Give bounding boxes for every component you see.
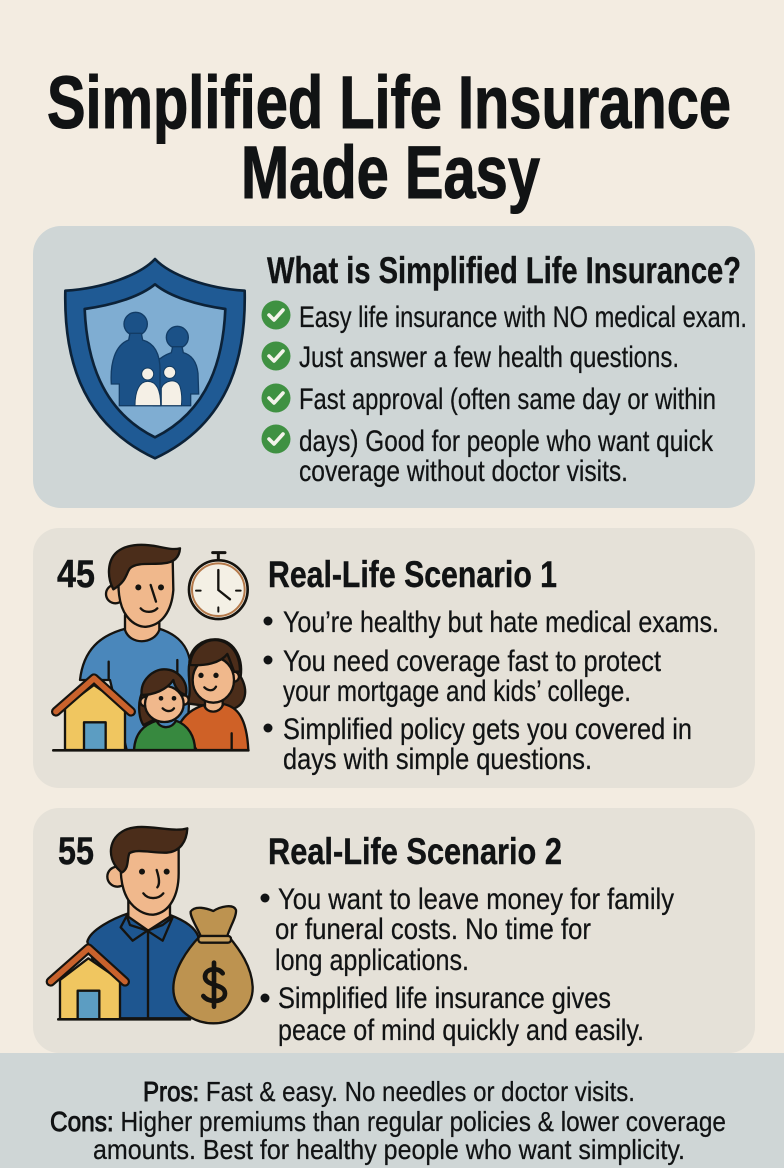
icon: check 2 bbox=[262, 342, 290, 370]
footer: pros and cons: amounts. Best for healthy people who want simplicity. bbox=[93, 1134, 685, 1165]
bullets: scenario 1 bbox=[264, 606, 719, 776]
bullets: scenario 2: or funeral costs. No time for bbox=[275, 913, 591, 946]
age 45: 45 bbox=[57, 553, 95, 596]
bullets: scenario 2: You want to leave money for family bbox=[278, 883, 674, 916]
icon: stopwatch bbox=[189, 553, 248, 619]
title: Made Easy bbox=[241, 131, 540, 214]
footer: pros and cons bbox=[0, 1053, 784, 1168]
illustration: man, house and money bag bbox=[51, 827, 253, 1023]
heading: scenario 2: Real-Life Scenario 2 bbox=[268, 831, 562, 872]
panel: what is simplified life insurance bbox=[33, 226, 755, 508]
icon: check 3 bbox=[262, 384, 290, 412]
text: definition list: coverage without doctor visits. bbox=[299, 455, 628, 488]
icon: check 4 bbox=[262, 424, 290, 454]
heading: scenario 1: Real-Life Scenario 1 bbox=[268, 554, 557, 595]
bullets: scenario 2: Simplified life insurance gives bbox=[278, 982, 611, 1015]
bullets: scenario 1: your mortgage and kids’ college. bbox=[283, 675, 631, 708]
footer: pros and cons: Pros: Fast & easy. No needles or doctor visits. bbox=[143, 1076, 635, 1107]
bullets: scenario 2: peace of mind quickly and easily. bbox=[278, 1014, 644, 1047]
bullets: scenario 2: long applications. bbox=[275, 944, 469, 977]
title bbox=[47, 61, 731, 214]
age 55: 55 bbox=[58, 830, 94, 873]
icon: check 1 bbox=[262, 300, 290, 330]
panel: scenario 2 bbox=[33, 808, 755, 1053]
text: definition list: Just answer a few health questions. bbox=[299, 341, 679, 374]
bullets: scenario 1: You need coverage fast to protect bbox=[283, 645, 662, 678]
bullets: scenario 1: days with simple questions. bbox=[283, 743, 592, 776]
bullets: scenario 2 bbox=[260, 883, 674, 1047]
bullets: scenario 1: Simplified policy gets you covered in bbox=[283, 713, 692, 746]
panel: scenario 1 bbox=[33, 528, 755, 788]
icon: family shield bbox=[65, 259, 245, 458]
text: definition list bbox=[299, 301, 747, 488]
illustration: father, children and house bbox=[53, 545, 248, 750]
